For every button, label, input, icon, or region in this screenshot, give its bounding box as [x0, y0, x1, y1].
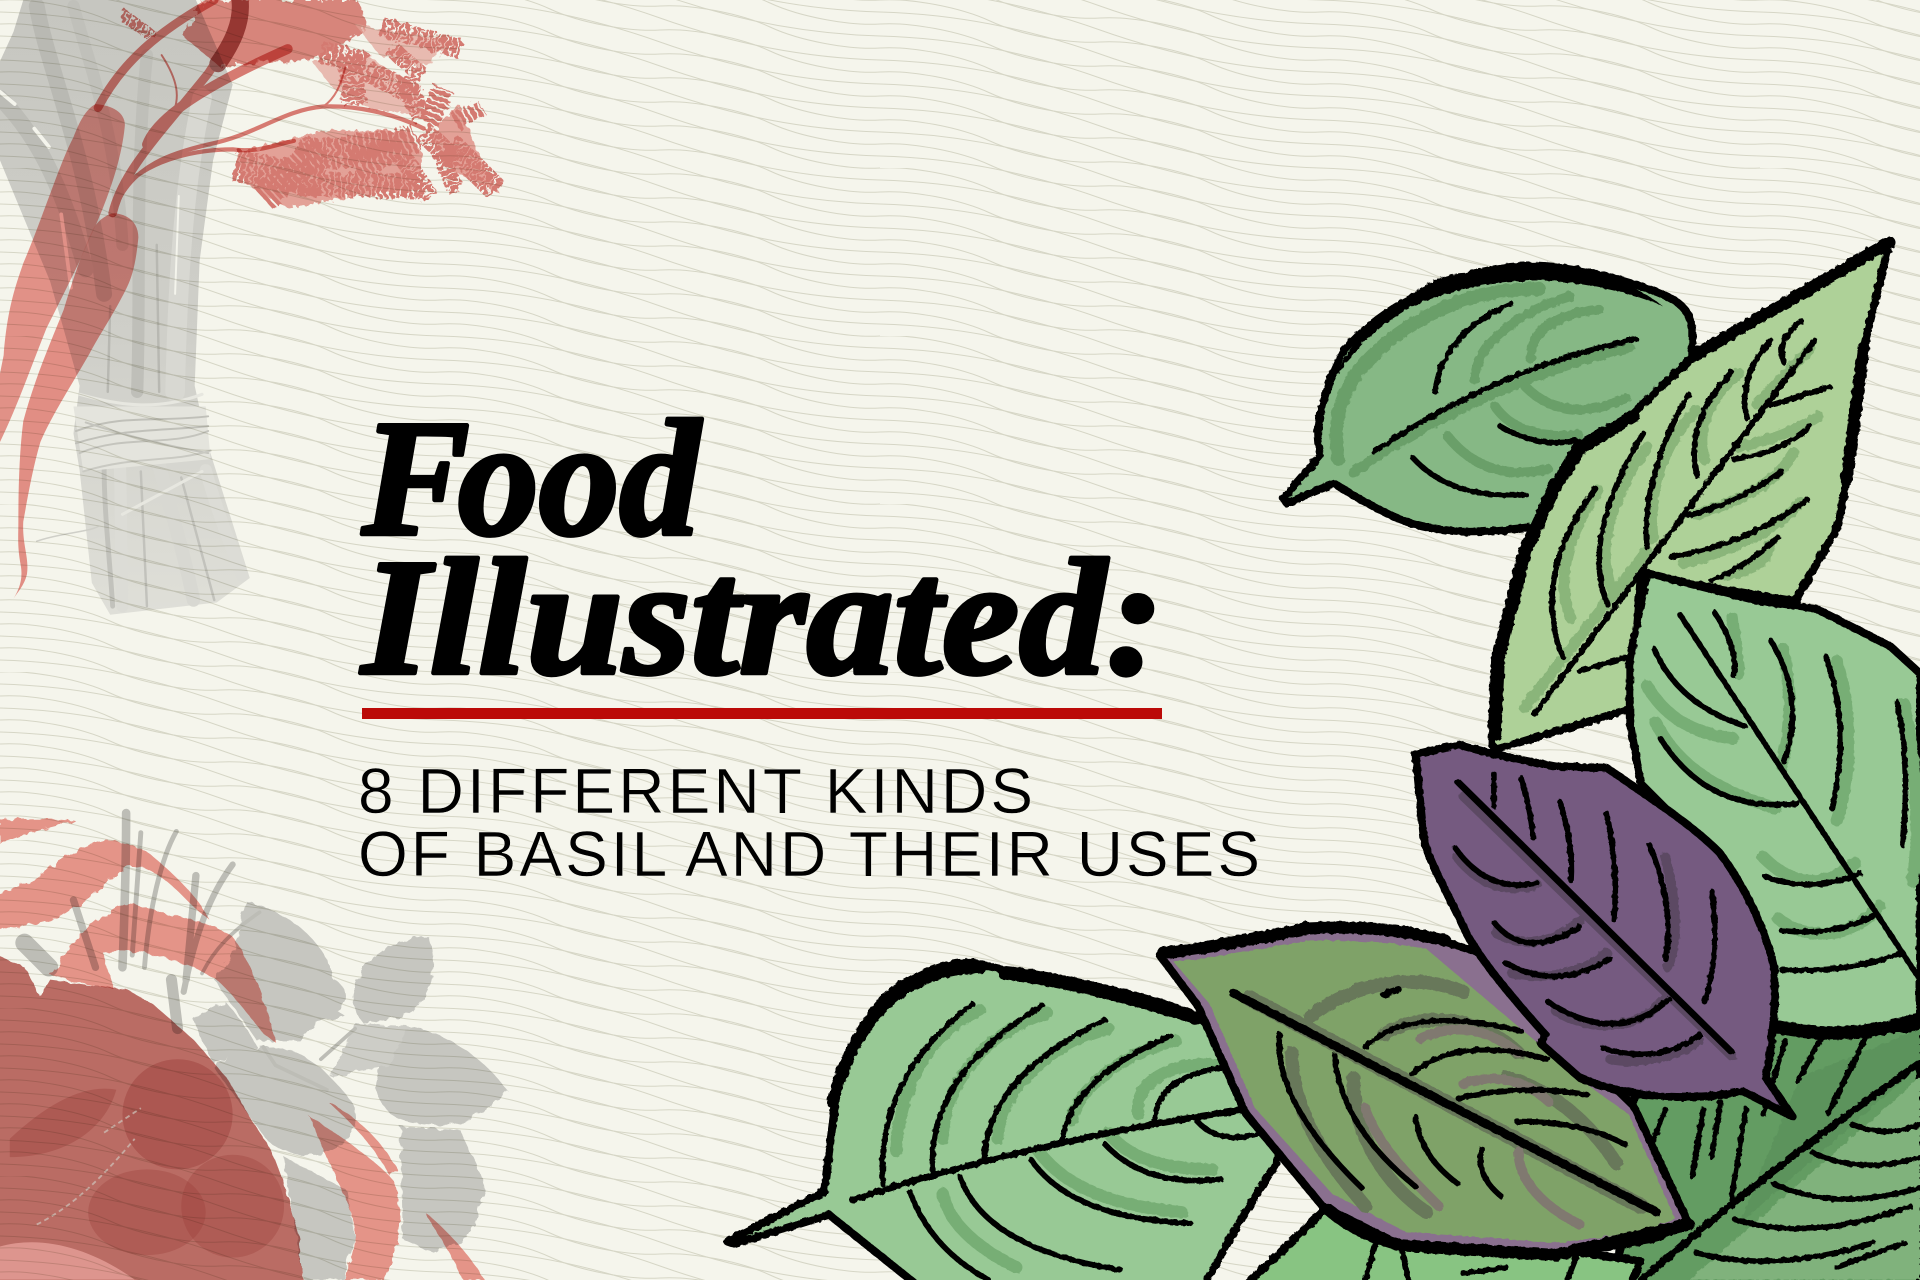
leaf: top mid-green [1283, 264, 1692, 532]
leaf: bottom left large green [727, 962, 1298, 1280]
basil leaves illustration [727, 242, 1920, 1280]
carrot leaf fronds [122, 0, 500, 208]
faded photo: asparagus and carrots [0, 0, 424, 615]
leaf: olive with purple rim [1160, 927, 1689, 1255]
leaf: top light green [1491, 242, 1889, 749]
leaf: bottom centre green [1243, 1206, 1641, 1280]
subtitle: 8 DIFFERENT KINDS [358, 755, 1033, 827]
twine [37, 394, 211, 541]
herb grass spikes [24, 813, 355, 1090]
red claws [0, 819, 484, 1280]
title: Food Illustrated: Illustrated: [360, 525, 1164, 709]
carrot roots [0, 104, 138, 599]
title: Food Illustrated: Food [361, 386, 703, 570]
leaf: dark green lower right [1616, 1029, 1920, 1280]
title: Food Illustrated [360, 386, 1164, 709]
carrot stems [98, 0, 424, 213]
leaf: purple basil [1416, 744, 1793, 1117]
crab pale underside [0, 1108, 141, 1280]
leaf: top right big green [1630, 573, 1920, 1033]
grey herb leaves [193, 901, 507, 1280]
asparagus bundle [0, 0, 250, 615]
faded photo: crab, herbs and leaves [0, 813, 507, 1280]
crab shell details [10, 1059, 284, 1258]
subtitle [358, 755, 1260, 890]
red crab body [0, 947, 304, 1280]
title block [358, 386, 1260, 890]
subtitle: OF BASIL AND THEIR USES [358, 818, 1260, 890]
red rule [362, 708, 1162, 719]
